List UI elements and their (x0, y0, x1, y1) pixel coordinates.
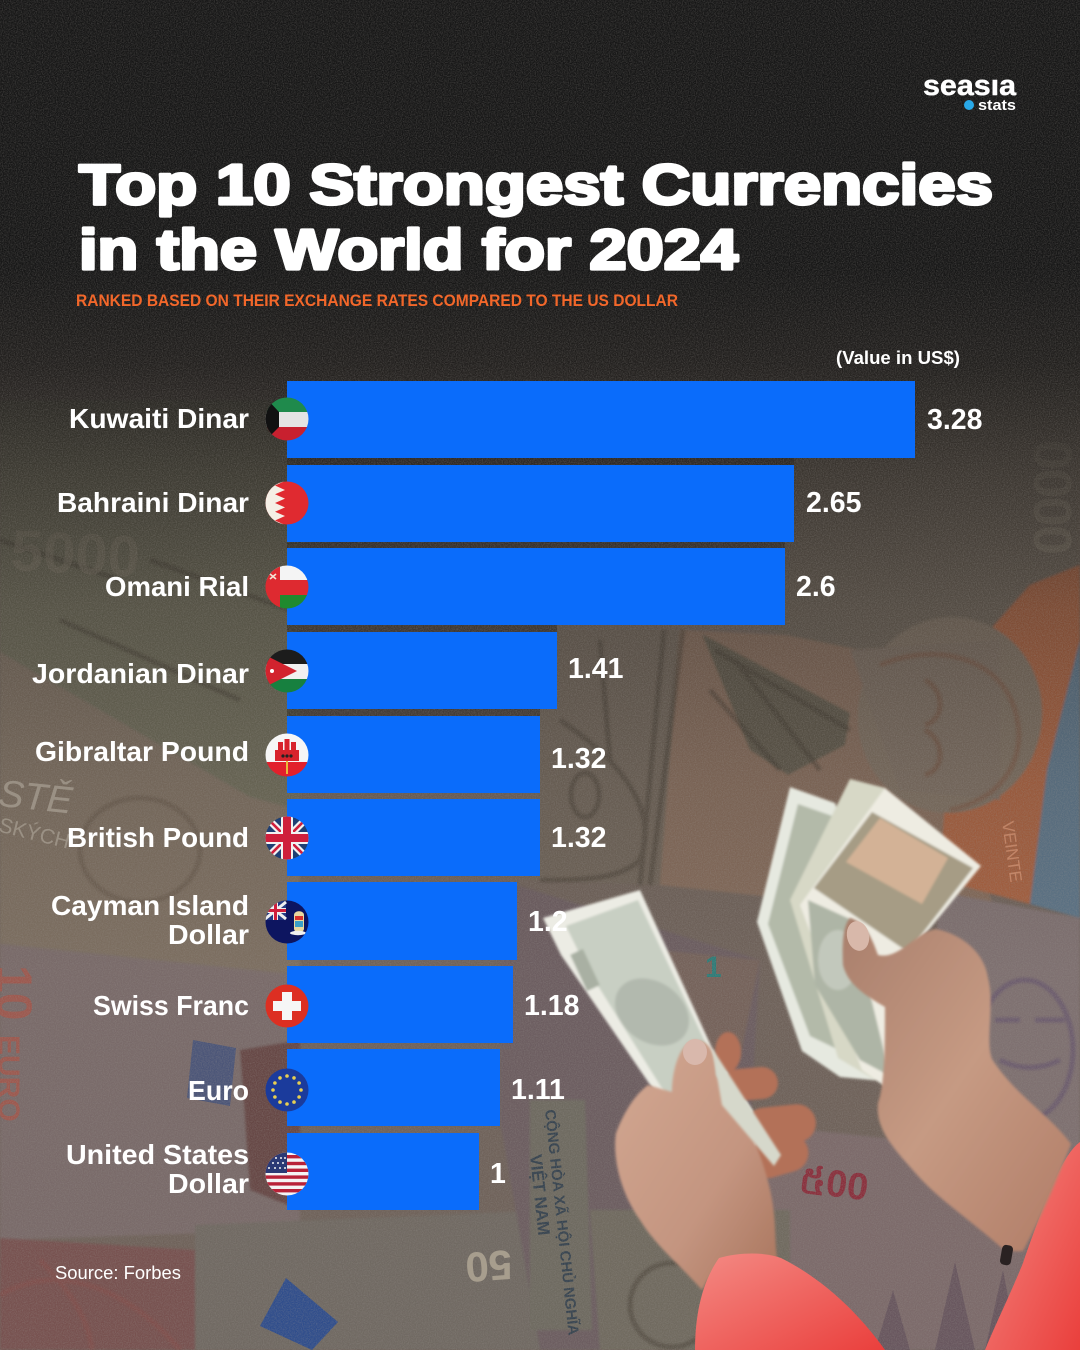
bars (287, 381, 915, 1210)
bracelet (999, 1244, 1014, 1266)
euro note (0, 944, 300, 1240)
left banknotes (543, 890, 781, 1166)
category labels: British Pound (67, 822, 249, 853)
banknote print: Viet Nam: VIỆT NAM (526, 1153, 553, 1236)
values: 1 (490, 1158, 506, 1190)
central mauve note (500, 880, 760, 1350)
banknote print: EU flag patch (187, 1040, 236, 1106)
left hand (615, 1040, 778, 1290)
category labels: Bahraini Dinar (57, 487, 249, 518)
right sleeve (985, 1142, 1080, 1350)
axis unit note: (Value in US$) (836, 348, 960, 368)
values: 1.41 (568, 653, 624, 685)
banknote print: VEINTE: VEINTE (998, 820, 1025, 883)
orange note (940, 565, 1080, 904)
banknote print: Viet Nam: CỘNG HÒA XÃ HỘI CHỦ NGHĨA (541, 1109, 583, 1336)
category labels: Swiss Franc (93, 990, 249, 1021)
icon: US flag (265, 1152, 309, 1196)
banknote print: temple silhouette (875, 1262, 1018, 1350)
icon: Cayman Islands flag (265, 900, 309, 944)
values (490, 404, 982, 1190)
category labels: Jordanian Dinar (32, 658, 249, 689)
purple portrait note (920, 892, 1080, 1190)
values: 2.65 (806, 487, 862, 519)
icon: Gibraltar flag (265, 733, 309, 777)
title: in the World for 2024 (79, 218, 738, 282)
values: 2.6 (796, 571, 836, 603)
title: Top 10 Strongest Currencies (79, 153, 993, 217)
values: 1.32 (551, 743, 606, 775)
upper left green note (0, 400, 300, 810)
icon: Oman flag (265, 565, 309, 609)
banknote print: blue 1: 1 (705, 951, 722, 984)
riel note (760, 1125, 1080, 1350)
dark green stripe block (702, 634, 850, 775)
left fingers (715, 1032, 818, 1183)
icon: UK flag (265, 816, 309, 860)
logo word: stats: stats (978, 97, 1016, 114)
bar gap shadows (287, 458, 794, 716)
banknote print: 500 riel: ៥00 (797, 1159, 871, 1209)
values: 3.28 (927, 404, 982, 436)
banknote print: EU flag patch lower (260, 1278, 338, 1350)
icon: Bahrain flag (265, 481, 309, 525)
banknote print: 5000: 5000 (9, 518, 142, 590)
values: 1.32 (551, 822, 606, 854)
blue note (1030, 640, 1080, 918)
left sleeve (695, 1254, 885, 1350)
category labels: Dollar (168, 1168, 249, 1199)
photo: hands holding rupee notes (543, 779, 1080, 1350)
left thumbnail (683, 1039, 707, 1065)
icon: Kuwait flag (265, 397, 309, 441)
logo word: seasia: seasıa (923, 70, 1017, 102)
category labels: Omani Rial (105, 571, 249, 602)
banknote print: 50: 50 (464, 1241, 514, 1291)
grey note top right (760, 330, 1080, 670)
bottom euro note (0, 1238, 195, 1350)
category labels: United States (66, 1139, 249, 1170)
icon: Switzerland flag (265, 984, 309, 1028)
category labels (32, 403, 249, 1199)
title (79, 153, 993, 282)
category labels: Cayman Island (51, 890, 249, 921)
logo dot (964, 100, 974, 110)
portrait oval (842, 603, 1058, 827)
category labels: Dollar (168, 919, 249, 950)
bar chart (32, 381, 982, 1210)
category labels: Euro (188, 1075, 249, 1106)
banknote detail: ink lines and portraits (0, 540, 1073, 1350)
category labels: Kuwaiti Dinar (69, 403, 249, 434)
subtitle: RANKED BASED ON THEIR EXCHANGE RATES COMPARED TO THE US DOLLAR (76, 292, 678, 310)
category labels: Gibraltar Pound (35, 736, 249, 767)
left bank note edge (712, 1048, 781, 1166)
values: 1.2 (528, 906, 568, 938)
right hand (843, 918, 1071, 1251)
icon: EU flag (265, 1068, 309, 1112)
lower dollar note (590, 1210, 790, 1350)
dollar note (530, 625, 690, 885)
right banknotes (757, 779, 981, 1090)
values: 1.11 (511, 1074, 565, 1106)
values: 1.18 (524, 990, 579, 1022)
icon: Jordan flag (265, 649, 309, 693)
logo: seasia stats (923, 70, 1017, 114)
brown note (660, 630, 1000, 920)
right thumbnail (844, 919, 872, 953)
source note: Source: Forbes (55, 1263, 181, 1283)
portrait note (0, 652, 300, 975)
